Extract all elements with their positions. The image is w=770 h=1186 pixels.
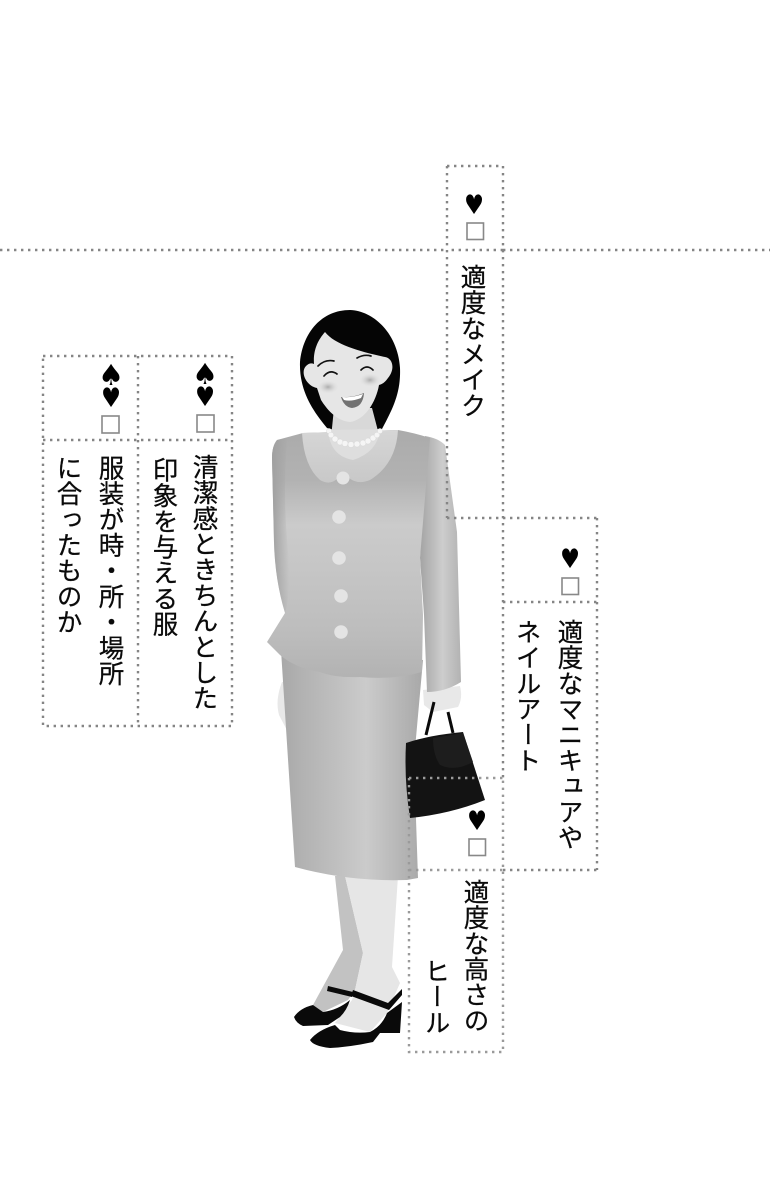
hair [300, 310, 400, 431]
shoes [294, 986, 402, 1048]
necklace [326, 428, 383, 448]
buttons [332, 472, 350, 639]
panel: manicure [554, 543, 583, 850]
panel: makeup [457, 189, 486, 418]
text: impression: 印象を与える服 [149, 457, 178, 637]
text: makeup: 適度なメイク [457, 264, 486, 418]
text: heel: ヒール [421, 958, 449, 1035]
neckline [328, 429, 380, 460]
legs [313, 876, 400, 1032]
checkbox [467, 223, 484, 240]
neck [330, 408, 381, 444]
panel: clothing for the occasion [95, 358, 124, 686]
face [304, 332, 392, 422]
illustration: woman in a suit [267, 310, 485, 1048]
icon: heart: ♥ [467, 805, 487, 837]
icon: heart: ♥ [101, 382, 121, 414]
mouth [341, 393, 364, 408]
text: nail art: ネイルアート [512, 619, 540, 773]
checkbox [102, 416, 119, 433]
right hand [423, 686, 461, 712]
dotted frames [0, 166, 770, 1052]
icon: heart: ♥ [195, 381, 215, 413]
icon: heart: ♥ [560, 543, 580, 575]
left hand [278, 680, 294, 738]
panel: heels [460, 805, 489, 1033]
checkbox [197, 415, 214, 432]
icon: spade: ♠ [192, 357, 218, 391]
right sleeve [420, 436, 461, 692]
text: occasion: 服装が時・所・場所 [95, 455, 124, 686]
skirt [281, 650, 423, 880]
text: clean clothes: 清潔感ときちんとした [189, 454, 218, 711]
icon: heart: ♥ [464, 189, 484, 221]
checkbox [469, 839, 486, 856]
panel: clean clothes [189, 357, 218, 711]
eyes and eyebrows [318, 355, 373, 376]
collar [302, 430, 398, 483]
text: manicure: 適度なマニキュアや [554, 619, 583, 850]
text: heel height: 適度な高さの [460, 879, 489, 1033]
checkbox [562, 578, 578, 594]
handbag [406, 702, 485, 818]
cheeks [317, 373, 381, 394]
icon: spade: ♠ [98, 358, 124, 392]
text: suitability: に合ったものか [53, 455, 82, 635]
jacket [267, 430, 430, 678]
left sleeve shading [272, 438, 289, 613]
